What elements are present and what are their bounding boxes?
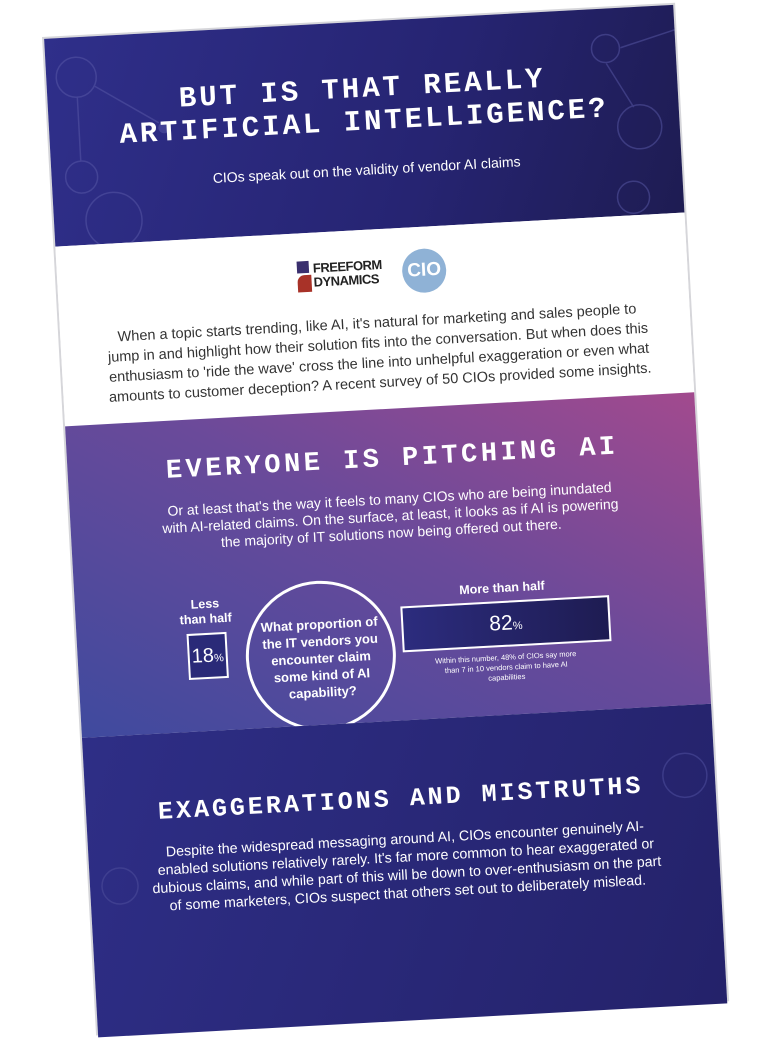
logo: freeform dynamics: DYNAMICS: [313, 271, 379, 290]
intro paragraph: When a topic starts trending, like AI, it's natural for marketing and sales people to jump in and highlight how their solution fits into the conversation. But when does this enthusiasm to 'ride the wave' cross the line into unhelpful exaggeration or even what amounts to customer deception? A recent survey of 50 CIOs provided some insights.: [108, 301, 652, 406]
stat: less than half: [179, 596, 232, 680]
stat: more than half: 82%: [489, 611, 523, 636]
logos: [296, 248, 446, 293]
stat: less than half: Less: [190, 596, 220, 612]
subtitle: CIOs speak out on the validity of vendor AI claims: [212, 153, 521, 186]
panel: exaggerations: [82, 704, 727, 1037]
stat: less than half: 18%: [191, 645, 224, 668]
circle question: What proportion of the IT vendors you encounter claim some kind of AI capability?: [260, 614, 378, 702]
heading: EXAGGERATIONS AND MISTRUTHS: [157, 772, 644, 827]
title: ARTIFICIAL INTELLIGENCE?: [119, 92, 609, 152]
text: Or at least that's the way it feels to many CIOs who are being inundated with AI-related claims. On the surface, at least, it looks as if AI is powering the majority of IT solutions now being offered out there.: [162, 479, 619, 550]
text: Despite the widespread messaging around AI, CIOs encounter genuinely AI-enabled solutions relatively rarely. It's far more common to hear exaggerated or dubious claims, and while part of this will be down to over-enthusiasm on the part of some marketers, CIOs suspect that others set out to deliberately mislead.: [152, 819, 662, 914]
stat: more than half: More than half: [459, 579, 545, 597]
stat: less than half: than half: [179, 611, 232, 627]
decorative circles: [102, 752, 708, 905]
heading: EVERYONE IS PITCHING AI: [165, 432, 619, 487]
title: BUT IS THAT REALLY: [178, 63, 547, 116]
stat: more than half: Within this number, 48% of CIOs say more than 7 in 10 vendors claim to have AI capabilities: [435, 649, 577, 683]
panel: everyone is pitching AI: [65, 392, 711, 738]
decorative network: [56, 29, 674, 244]
circle question: [242, 577, 400, 735]
stat: more than half: [400, 579, 612, 683]
title: [119, 63, 609, 152]
logo: CIO: [401, 248, 447, 294]
logo: CIO: CIO: [407, 259, 442, 282]
logo: freeform dynamics: FREEFORM: [312, 257, 382, 276]
panel: intro: [55, 213, 694, 426]
logo: freeform dynamics: [296, 257, 382, 292]
panel: header: [44, 5, 684, 247]
